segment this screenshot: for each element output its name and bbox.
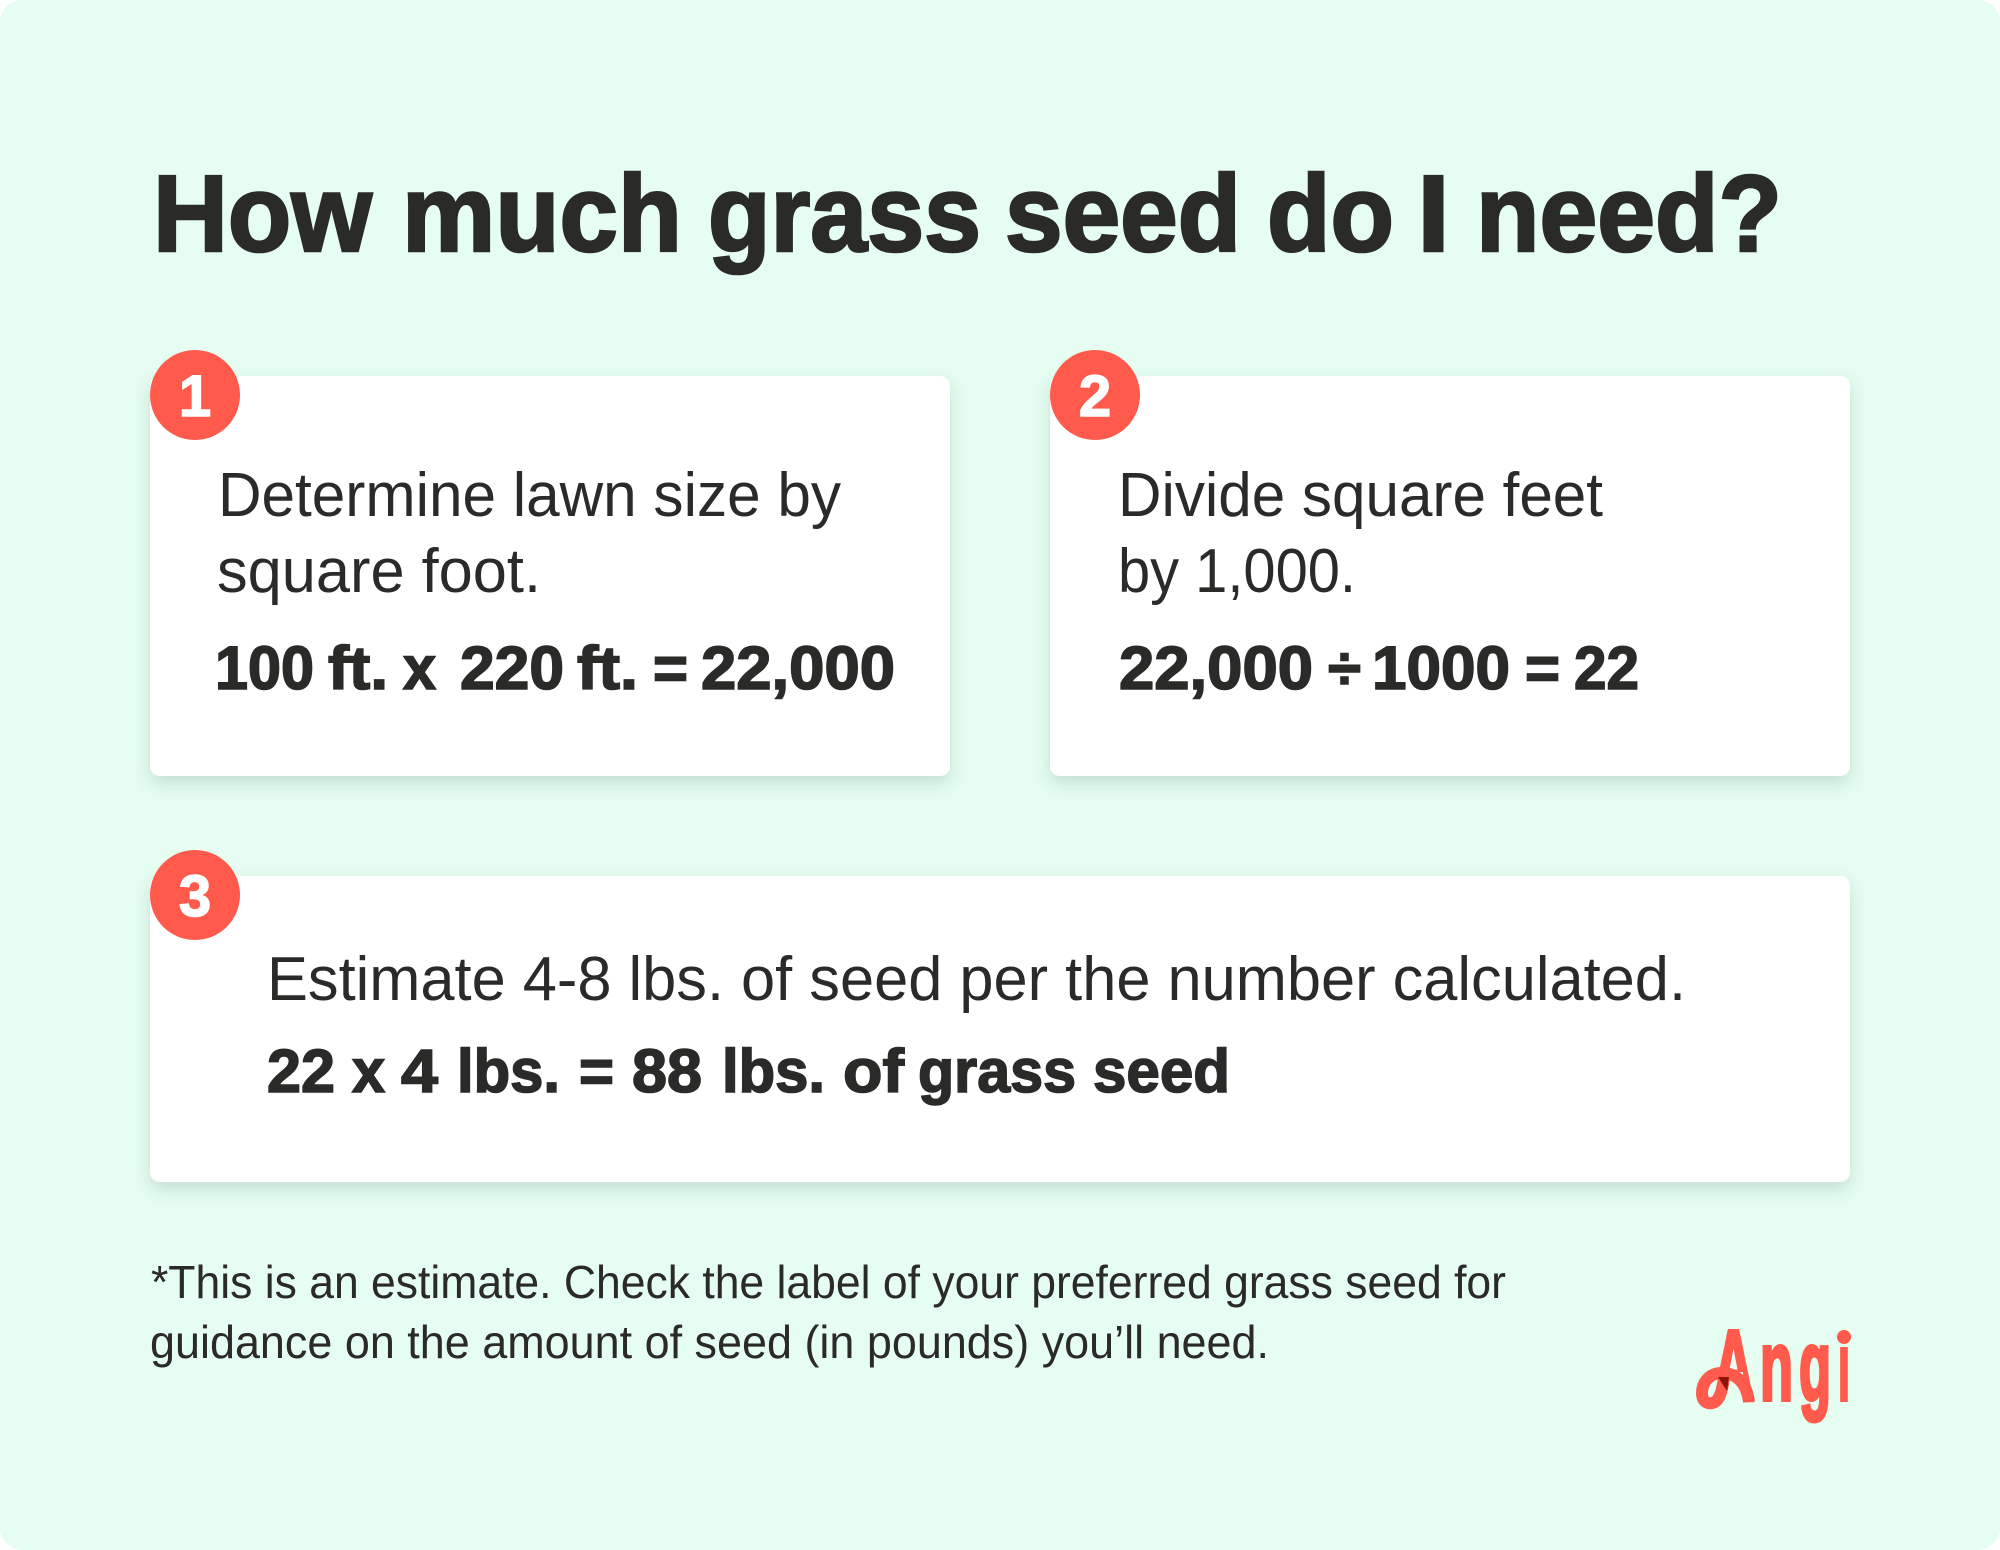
step 2 calculation: = xyxy=(1525,634,1560,702)
title: grass xyxy=(708,153,981,275)
step 3 calculation: x xyxy=(352,1037,385,1105)
step 2 calculation xyxy=(1119,634,1639,702)
step 2 instruction: by 1,000. xyxy=(1118,537,1356,606)
text: i xyxy=(1838,1310,1850,1422)
step 3 calculation: lbs. xyxy=(457,1037,560,1105)
icon: Angi logo: A xyxy=(1713,1310,1754,1422)
step 3 calculation: 4 xyxy=(401,1037,438,1105)
step 1 calculation: 100 xyxy=(215,634,314,702)
icon: Angi logo xyxy=(1696,1329,1851,1424)
title: much xyxy=(402,153,682,275)
step 1 calculation: = xyxy=(653,634,688,702)
step 3 calculation: = xyxy=(579,1037,614,1105)
step 3 calculation: lbs. xyxy=(722,1037,825,1105)
title: do xyxy=(1267,153,1394,275)
panel: step 1 xyxy=(150,350,950,776)
footnote: guidance on the amount of seed (in pounds) you’ll need. xyxy=(150,1316,1269,1368)
title: seed xyxy=(1005,153,1241,275)
footnote xyxy=(150,1256,1506,1368)
icon: number 1 badge xyxy=(150,350,240,440)
step 3 calculation: of xyxy=(843,1037,905,1105)
step 1 instruction xyxy=(217,461,841,606)
step 2 instruction: Divide square feet xyxy=(1118,461,1603,530)
title: need? xyxy=(1476,153,1782,275)
step 1 instruction: square foot. xyxy=(217,537,541,606)
icon: Angi logo: g xyxy=(1799,1310,1831,1422)
step 3 calculation: seed xyxy=(1093,1037,1230,1105)
panel: step 3 xyxy=(150,850,1850,1182)
icon: number 3 badge xyxy=(150,850,240,940)
step 2 calculation: 22 xyxy=(1574,634,1639,702)
title: How xyxy=(153,153,372,275)
step 2 calculation: 1000 xyxy=(1372,634,1510,702)
step 2 calculation: 22,000 xyxy=(1119,634,1313,702)
icon: Angi logo: n xyxy=(1760,1310,1793,1422)
step 2 calculation: ÷ xyxy=(1328,634,1361,702)
title: I xyxy=(1417,153,1450,275)
step 1 calculation: 220 xyxy=(460,634,564,702)
icon: number 1 badge: 1 xyxy=(179,364,211,429)
step 3 calculation xyxy=(267,1037,1230,1105)
step 1 calculation: ft. xyxy=(577,634,638,702)
title xyxy=(153,153,1782,275)
step 3 instruction: Estimate 4-8 lbs. of seed per the number calculated. xyxy=(267,945,1686,1014)
step 1 calculation: x xyxy=(403,634,436,702)
step 1 instruction: Determine lawn size by xyxy=(218,461,841,530)
icon: number 2 badge: 2 xyxy=(1079,364,1111,429)
step 3 calculation: 88 xyxy=(632,1037,702,1105)
panel: step 2 xyxy=(1050,350,1850,776)
step 1 calculation: ft. xyxy=(328,634,388,702)
step 3 calculation: grass xyxy=(918,1037,1076,1105)
icon: number 3 badge: 3 xyxy=(179,864,211,929)
step 3 calculation: 22 xyxy=(267,1037,335,1105)
step 1 calculation xyxy=(215,634,895,702)
icon: number 2 badge xyxy=(1050,350,1140,440)
footnote: *This is an estimate. Check the label of your preferred grass seed for xyxy=(151,1256,1506,1308)
step 2 instruction xyxy=(1118,461,1603,606)
step 1 calculation: 22,000 xyxy=(701,634,895,702)
